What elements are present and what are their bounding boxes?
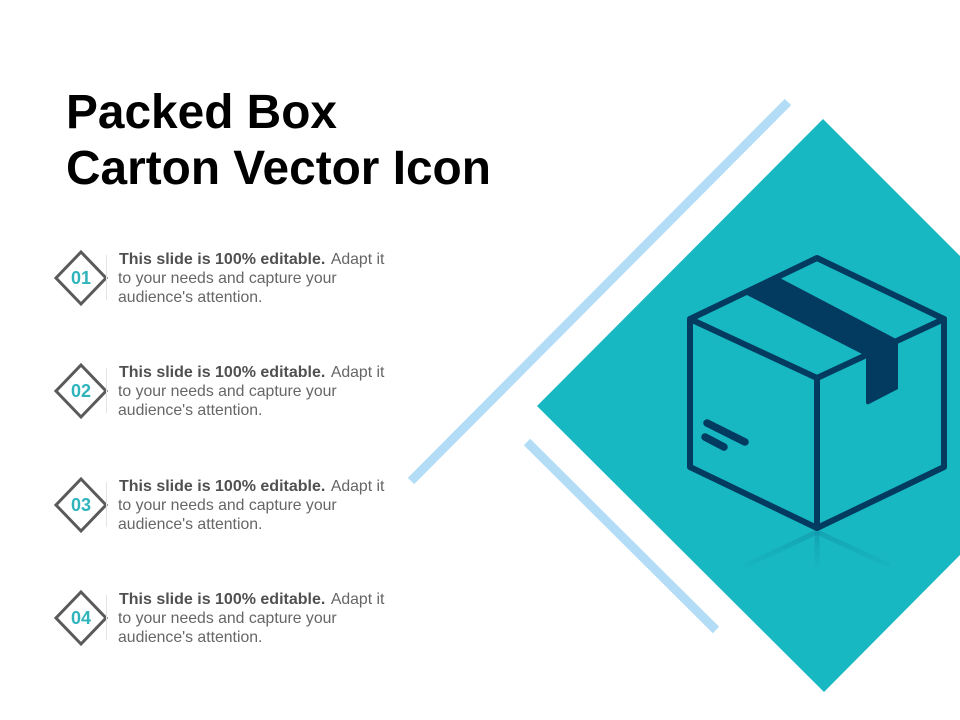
- accent line: lower light blue: [527, 442, 716, 630]
- accent line: upper light blue: [411, 102, 788, 481]
- badge 03: 03: [71, 495, 91, 515]
- badge 01: 01: [71, 268, 91, 288]
- text 04: [118, 591, 384, 646]
- list item 04: [54, 590, 384, 646]
- text 03: to your needs and capture your: [118, 497, 337, 514]
- text 03: [118, 478, 384, 533]
- text 02: audience's attention.: [118, 402, 262, 419]
- badge 02: 02: [71, 381, 91, 401]
- text 02: This slide is 100% editable. Adapt it: [119, 364, 384, 381]
- icon: box tape: [743, 277, 898, 404]
- list item 03: [54, 477, 384, 533]
- list item 02: [54, 363, 384, 419]
- text 04: audience's attention.: [118, 629, 262, 646]
- icon: packed box: [690, 258, 944, 528]
- text 01: [118, 251, 384, 306]
- badge 04: 04: [71, 608, 91, 628]
- badge 02: [54, 363, 108, 419]
- text 04: to your needs and capture your: [118, 610, 337, 627]
- list item 01: [54, 250, 384, 306]
- text 03: This slide is 100% editable. Adapt it: [119, 478, 384, 495]
- text 04: This slide is 100% editable. Adapt it: [119, 591, 384, 608]
- text 02: to your needs and capture your: [118, 383, 337, 400]
- title: [66, 86, 491, 195]
- icon: box reflection: [745, 532, 890, 570]
- title: Packed Box: [66, 86, 337, 139]
- badge 01: [54, 250, 108, 306]
- text 01: to your needs and capture your: [118, 270, 337, 287]
- text 01: This slide is 100% editable. Adapt it: [119, 251, 384, 268]
- badge 03: [54, 477, 108, 533]
- title: Carton Vector Icon: [66, 142, 491, 195]
- panel: teal diamond: [537, 119, 960, 692]
- text 03: audience's attention.: [118, 516, 262, 533]
- text 01: audience's attention.: [118, 289, 262, 306]
- badge 04: [54, 590, 108, 646]
- text 02: [118, 364, 384, 419]
